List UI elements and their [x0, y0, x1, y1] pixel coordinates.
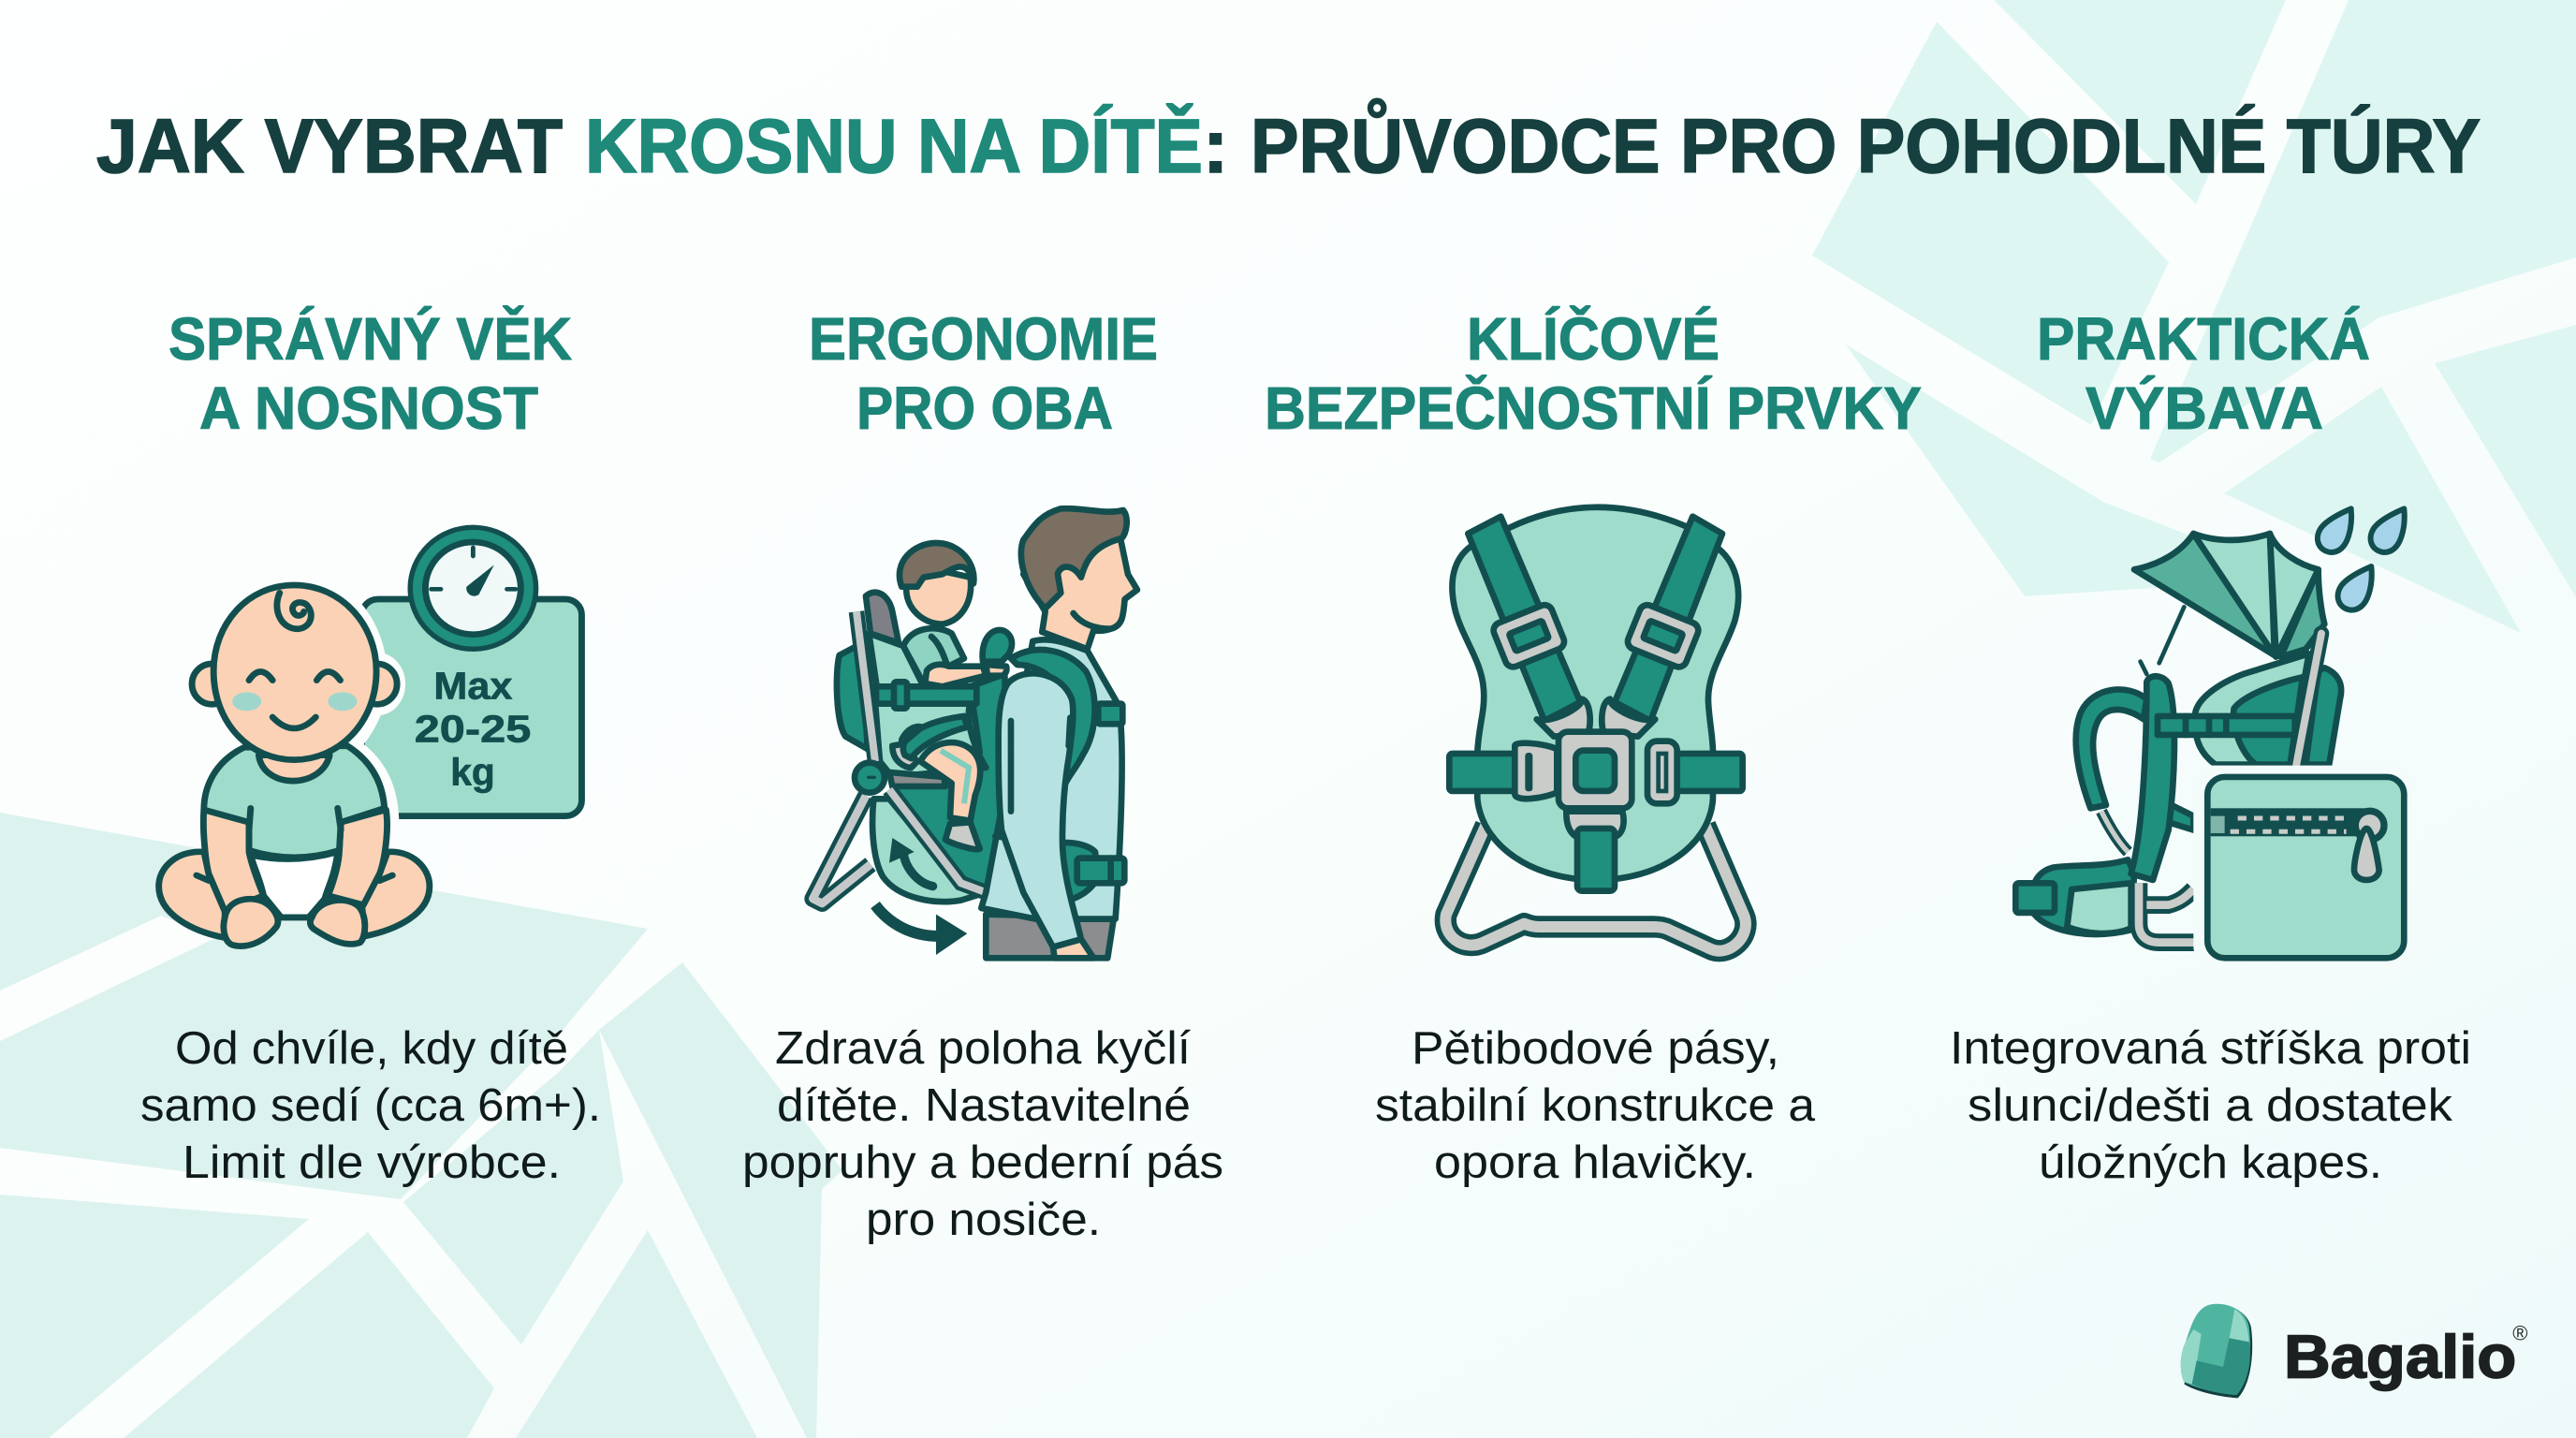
back pad — [1452, 507, 1738, 880]
heading: equipment — [2037, 305, 2370, 442]
icon: baby with scale — [159, 527, 581, 946]
pocket — [2193, 766, 2412, 965]
heading: equipment: PRAKTICKÁ — [2037, 305, 2370, 373]
heading: age and load: SPRÁVNÝ VĚK — [168, 304, 572, 373]
description: ergonomics: dítěte. Nastavitelné — [777, 1080, 1191, 1131]
title — [96, 98, 2481, 189]
strap sliders — [1491, 603, 1701, 669]
canopy — [2134, 534, 2324, 674]
description: age and load — [140, 1023, 601, 1188]
heading: age and load — [168, 304, 572, 442]
description: ergonomics: Zdravá poloha kyčlí — [775, 1023, 1191, 1074]
description: equipment: úložných kapes. — [2039, 1137, 2382, 1188]
heading: equipment: VÝBAVA — [2086, 374, 2323, 442]
logo: Bagalio — [2181, 1304, 2527, 1398]
carrier body — [2015, 634, 2341, 943]
icon: five point harness — [1445, 507, 1746, 951]
title: : — [1203, 104, 1228, 189]
icon: carrier with canopy and pocket — [2015, 508, 2412, 965]
panel: ergonomics — [742, 305, 1223, 1245]
lower frame — [1445, 826, 1746, 951]
weight limit text: Max — [433, 665, 512, 707]
heading: safety: BEZPEČNOSTNÍ PRVKY — [1265, 374, 1922, 442]
description: age and load: Od chvíle, kdy dítě — [175, 1023, 568, 1074]
weight limit text: kg — [450, 751, 495, 793]
carrier frame and seat — [812, 593, 1011, 903]
panel: practical equipment — [1950, 305, 2471, 1188]
parent — [981, 508, 1137, 958]
weight limit text — [415, 665, 531, 793]
title: KROSNU NA DÍTĚ — [585, 103, 1203, 189]
title: PRŮVODCE PRO POHODLNÉ TÚRY — [1251, 98, 2481, 189]
title: JAK VYBRAT — [96, 104, 563, 189]
registered mark: ® — [2512, 1322, 2527, 1345]
heading: age and load: A NOSNOST — [199, 374, 538, 442]
icon: parent carrying child — [812, 508, 1137, 958]
description: age and load: samo sedí (cca 6m+). — [140, 1080, 601, 1131]
shoulder straps — [1468, 517, 1722, 737]
weight limit text: 20-25 — [415, 708, 531, 750]
rain drops — [2318, 508, 2405, 610]
description: ergonomics: pro nosiče. — [866, 1195, 1101, 1245]
description: equipment: Integrovaná stříška proti — [1950, 1023, 2471, 1074]
heading: safety — [1265, 304, 1922, 442]
description: safety — [1375, 1023, 1816, 1188]
logo pebble — [2181, 1304, 2252, 1398]
arrow: lower curve — [875, 905, 967, 955]
description: safety: Pětibodové pásy, — [1412, 1023, 1779, 1074]
description: age and load: Limit dle výrobce. — [183, 1137, 561, 1188]
description: ergonomics: popruhy a bederní pás — [742, 1137, 1223, 1188]
scale dial — [410, 527, 536, 649]
description: equipment: slunci/dešti a dostatek — [1968, 1080, 2453, 1131]
waist belt and buckles — [1449, 732, 1743, 891]
heading: ergonomics: ERGONOMIE — [809, 305, 1158, 373]
arrow: hip position — [889, 838, 933, 887]
description: safety: stabilní konstrukce a — [1375, 1080, 1816, 1131]
white halo — [204, 583, 388, 892]
baby — [159, 585, 430, 946]
description: safety: opora hlavičky. — [1434, 1137, 1756, 1188]
heading: ergonomics: PRO OBA — [856, 374, 1113, 442]
logo wordmark: Bagalio — [2284, 1323, 2516, 1391]
description: equipment — [1950, 1023, 2471, 1188]
child — [892, 543, 1012, 849]
panel: safety features — [1265, 304, 1922, 1188]
description: ergonomics — [742, 1023, 1223, 1245]
panel: age and load capacity — [140, 304, 601, 1188]
scale card — [362, 599, 581, 816]
heading: ergonomics — [809, 305, 1158, 442]
heading: safety: KLÍČOVÉ — [1467, 304, 1720, 373]
